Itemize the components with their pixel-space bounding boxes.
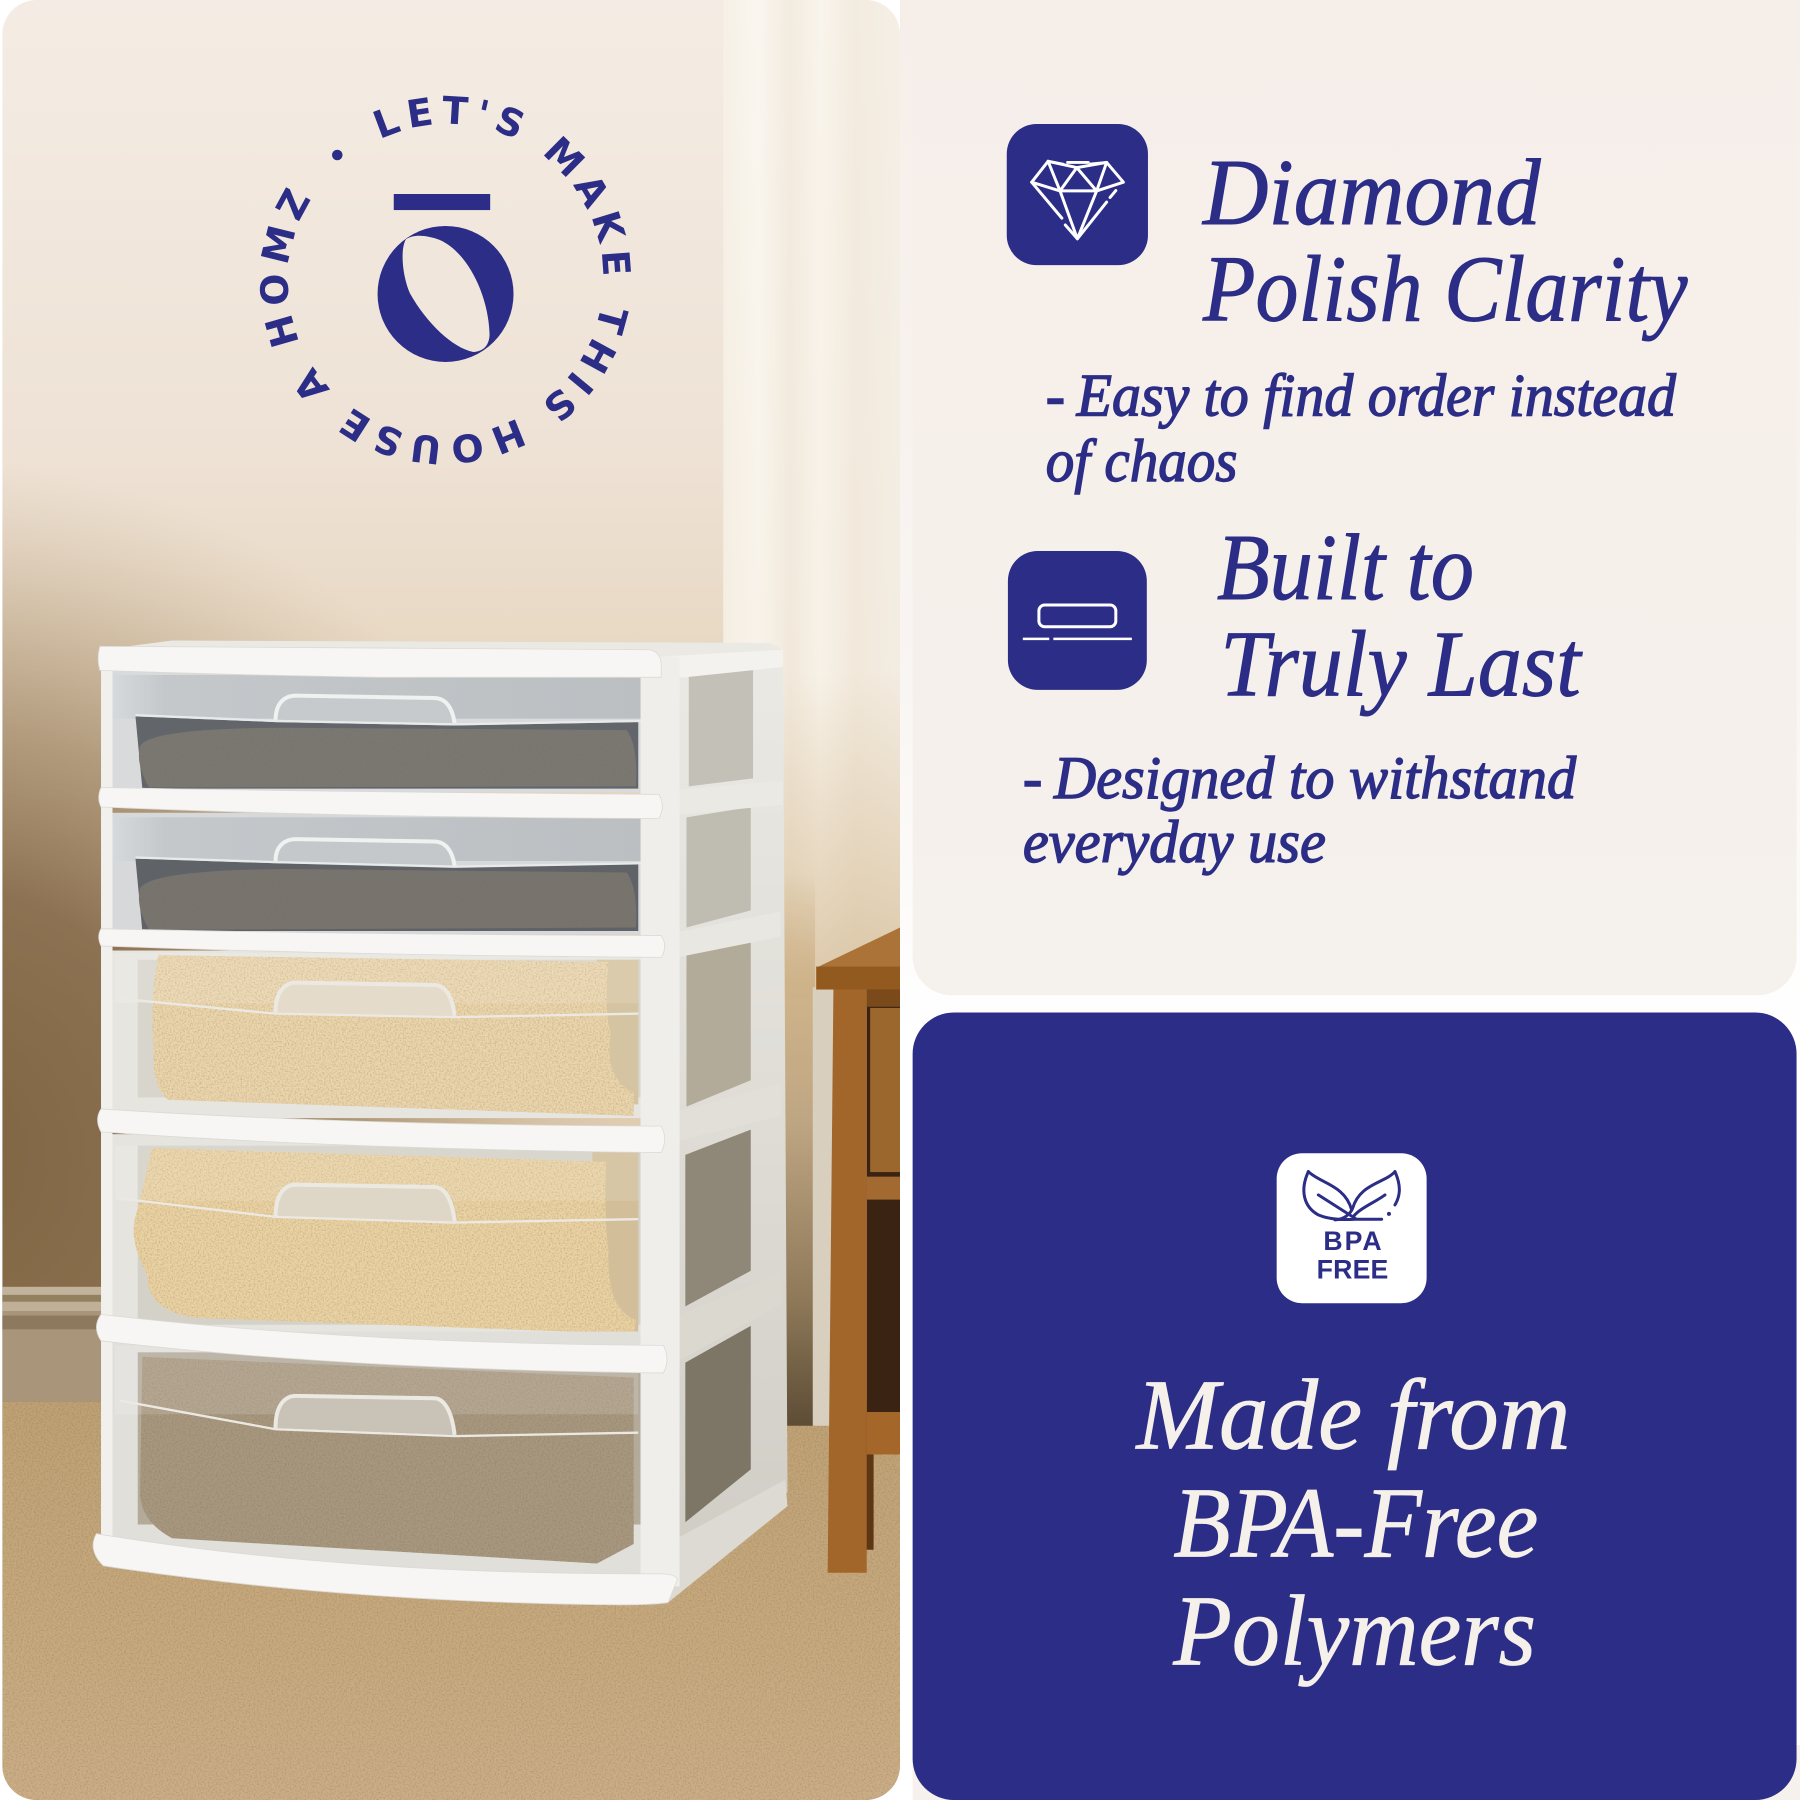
logo bar xyxy=(394,194,490,210)
text: easy to find order: - Easy to find order instead xyxy=(1046,363,1677,430)
heading: diamond polish clarity: Diamond xyxy=(1201,141,1541,245)
towel 1 xyxy=(135,716,638,789)
handle 2 xyxy=(276,839,455,866)
icon: diamond xyxy=(1007,124,1148,265)
text: designed to withstand xyxy=(1023,745,1577,876)
circular slogan: LET'S MAKE THIS HOUSE A HOMZ xyxy=(260,96,631,464)
heading: made from bpa-free polymers: Polymers xyxy=(1172,1575,1536,1687)
side windows xyxy=(685,669,753,1522)
drawer 4 xyxy=(106,1134,645,1345)
handle 1 xyxy=(276,696,455,723)
nightstand xyxy=(816,928,900,1573)
towel 3 xyxy=(152,955,634,1116)
panel: features xyxy=(913,0,1797,995)
heading: diamond polish clarity xyxy=(1201,141,1688,341)
towel 5 xyxy=(140,1357,634,1564)
text: designed to withstand: - Designed to withstand xyxy=(1023,745,1577,812)
drawer 3 xyxy=(106,951,645,1118)
drawer 2 xyxy=(106,813,645,934)
heading: made from bpa-free polymers: Made from xyxy=(1135,1359,1570,1471)
heading: built to truly last: Truly Last xyxy=(1220,613,1583,717)
icon: bpa free leaves: FREE xyxy=(1317,1255,1388,1285)
heading: built to truly last xyxy=(1217,516,1583,717)
icon: bpa free leaves xyxy=(1277,1153,1427,1303)
side frame xyxy=(659,651,788,1537)
drawer 1 xyxy=(106,670,645,792)
handle 5 xyxy=(276,1396,455,1435)
handle 3 xyxy=(276,983,455,1016)
text: designed to withstand: everyday use xyxy=(1023,809,1326,876)
icon: bpa free leaves: BPA xyxy=(1323,1226,1382,1256)
heading: made from bpa-free polymers: BPA-Free xyxy=(1173,1467,1538,1579)
heading: diamond polish clarity: Polish Clarity xyxy=(1202,237,1688,341)
baseboard xyxy=(2,1287,106,1402)
storage drawer tower xyxy=(93,641,788,1605)
text: easy to find order: of chaos xyxy=(1046,428,1238,495)
rails xyxy=(93,646,677,1605)
panel: bpa free xyxy=(913,1012,1797,1800)
top lid xyxy=(128,640,781,654)
text: easy to find order xyxy=(1046,363,1677,495)
logo: circular badge xyxy=(260,96,631,464)
curtain xyxy=(2,0,900,1800)
handle 4 xyxy=(276,1185,455,1221)
corner backing behind bottom panel xyxy=(913,1745,1800,1800)
icon: drawer slab xyxy=(1008,551,1147,690)
drawer 5 xyxy=(106,1332,645,1584)
logo o mark xyxy=(378,226,514,362)
page backdrop: cream fading to white xyxy=(900,0,1800,1148)
towel 2 xyxy=(135,859,638,931)
side rails xyxy=(660,650,788,1603)
frame columns xyxy=(101,654,680,1586)
panel: product photo xyxy=(2,0,900,1800)
heading: made from bpa-free polymers xyxy=(1135,1359,1570,1687)
carpet xyxy=(2,1402,900,1800)
heading: built to truly last: Built to xyxy=(1217,516,1474,620)
towel 4 xyxy=(134,1148,636,1334)
